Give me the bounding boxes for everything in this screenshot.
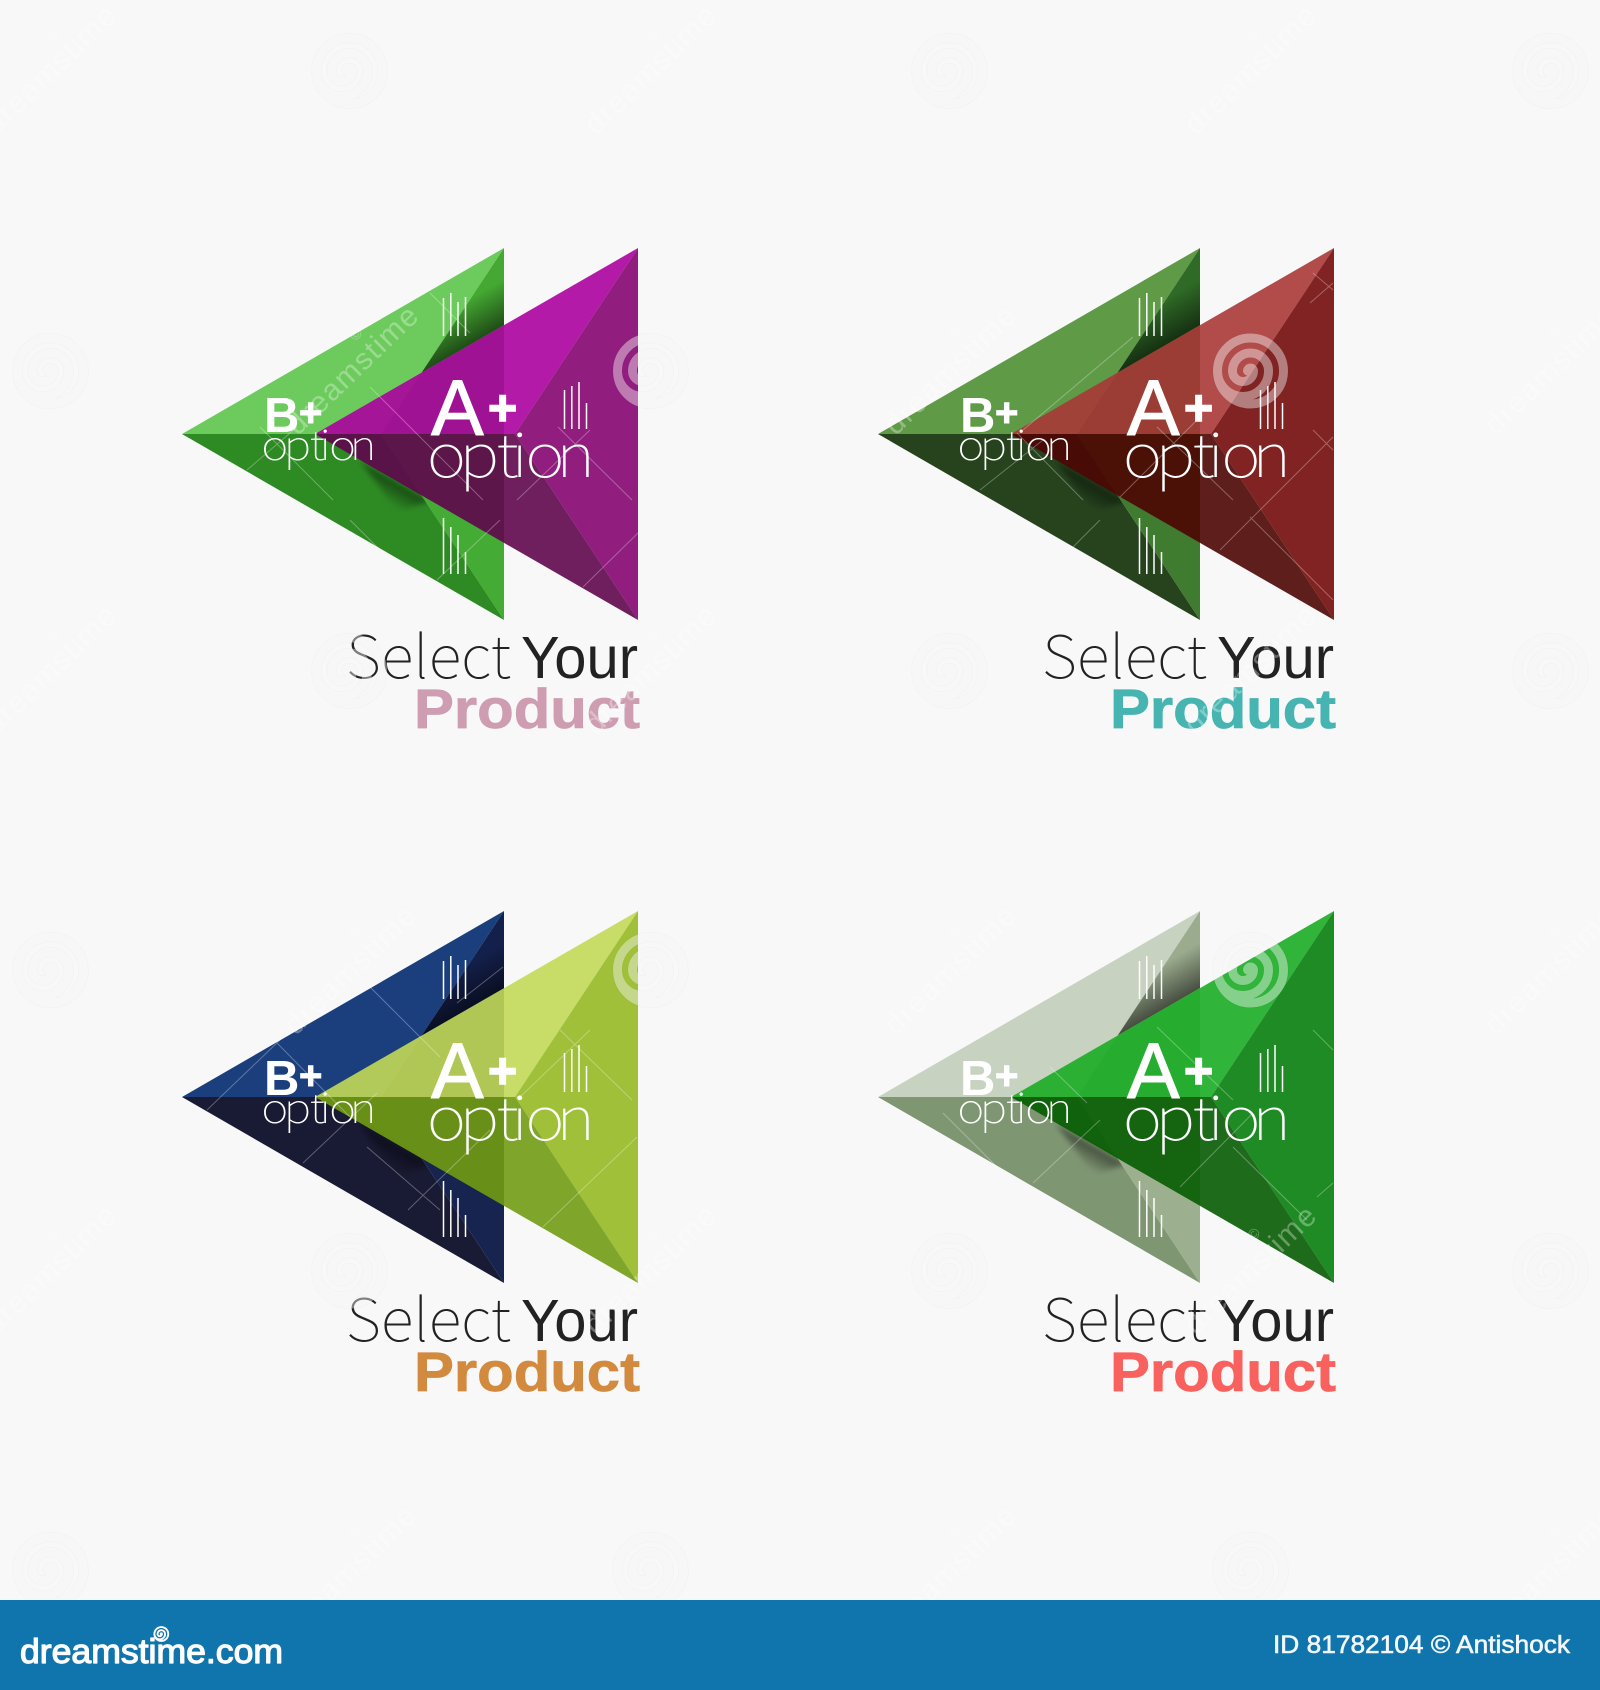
B+ grade: B [960, 389, 995, 443]
watermark: dreamstime diagonal text: © [44, 625, 64, 645]
icon: bars top [444, 956, 466, 999]
A+ grade [431, 363, 517, 452]
B+ grade [960, 1052, 1018, 1106]
watermark: dreamstime diagonal text: © [44, 25, 64, 45]
watermark: dreamstime diagonal text: © [644, 1225, 664, 1245]
back triangle: B option [878, 893, 1200, 1283]
B+ grade: + [995, 391, 1018, 435]
heading: product: Product [414, 677, 640, 740]
A+ grade: + [488, 1043, 517, 1099]
heading: select your [1042, 1273, 1334, 1358]
watermark: diagonal hairlines [207, 273, 1333, 1227]
B+ grade [264, 1052, 322, 1106]
watermark: dreamstime diagonal text: © [944, 325, 964, 345]
A+ grade: + [1184, 1043, 1213, 1099]
icon: bars top [444, 293, 466, 336]
watermark: dreamstime diagonal text: © [344, 925, 364, 945]
heading: product: Product [1110, 677, 1336, 740]
heading: select your: Select [1042, 1273, 1207, 1358]
large option label: option [427, 1071, 595, 1158]
icon: bars right [564, 1045, 586, 1092]
panel: lime and navy option arrows [182, 893, 640, 1403]
A+ grade [1127, 363, 1213, 452]
heading: select your [1042, 610, 1334, 695]
watermark: dreamstime diagonal text: dreamstime [278, 899, 423, 1041]
A+ grade: A [431, 1026, 484, 1115]
watermark: dreamstime diagonal text: © [344, 1525, 364, 1545]
icon: bars bottom [444, 518, 466, 574]
A+ grade: A [1127, 363, 1180, 452]
small option label: option [261, 413, 376, 472]
icon: bars right [564, 382, 586, 429]
heading: product: Product [414, 1340, 640, 1403]
watermark: dreamstime diagonal text: © [944, 925, 964, 945]
panel: purple and green option arrows [182, 230, 640, 740]
back triangle: B option [878, 230, 1200, 620]
A+ grade: A [431, 363, 484, 452]
watermark: dreamstime diagonal text: © [944, 1525, 964, 1545]
watermark: dreamstime diagonal text: © [644, 25, 664, 45]
small option label: option [957, 1076, 1072, 1135]
A+ grade [1127, 1026, 1213, 1115]
heading: select your: Select [346, 1273, 511, 1358]
B+ grade: + [299, 1054, 322, 1098]
heading: select your [346, 610, 638, 695]
A+ grade: + [488, 380, 517, 436]
watermark: dreamstime diagonal text: dreamstime [878, 899, 1023, 1041]
heading: select your: Your [521, 625, 638, 691]
icon: bars bottom [1140, 518, 1162, 574]
watermark: dreamstime diagonal text: © [1544, 925, 1564, 945]
front triangle: A option [1011, 248, 1334, 620]
front triangle: A option [315, 248, 638, 620]
footer logo text: dreamstime.com [20, 1633, 283, 1671]
A+ grade: + [1184, 380, 1213, 436]
B+ grade [264, 389, 322, 443]
icon: bars bottom [444, 1181, 466, 1237]
icon: bars bottom [1140, 1181, 1162, 1237]
icon: bars right [1260, 1045, 1282, 1092]
B+ grade: + [299, 391, 322, 435]
front triangle: A option [315, 911, 638, 1283]
panel: red and dark green option arrows [878, 230, 1336, 740]
large option label: option [1123, 1071, 1291, 1158]
icon: bars top [1140, 956, 1162, 999]
A+ grade [431, 1026, 517, 1115]
watermark: dreamstime diagonal text: dreamstime [1178, 599, 1323, 741]
panel: green and sage option arrows [878, 893, 1336, 1403]
large option label: option [427, 408, 595, 495]
footer logo spiral [154, 1627, 168, 1641]
watermark: dreamstime diagonal text: © [346, 325, 366, 345]
watermark: dreamstime diagonal text: dreamstime [878, 1499, 1023, 1641]
small option label: option [261, 1076, 376, 1135]
watermark: dreamstime diagonal text: dreamstime [578, 1199, 723, 1341]
A+ grade: A [1127, 1026, 1180, 1115]
watermark: dreamstime diagonal text: © [644, 625, 664, 645]
watermark: dreamstime diagonal text: dreamstime [578, 0, 723, 141]
heading: product: Product [1110, 1340, 1336, 1403]
B+ grade: B [960, 1052, 995, 1106]
watermark: dreamstime diagonal text: dreamstime [1178, 0, 1323, 141]
watermark: dreamstime diagonal text: dreamstime [280, 299, 425, 441]
heading: select your [346, 1273, 638, 1358]
front triangle: A option [1011, 911, 1334, 1283]
heading: select your: Your [1217, 625, 1334, 691]
heading: select your: Select [1042, 610, 1207, 695]
icon: bars right [1260, 382, 1282, 429]
watermark: dreamstime diagonal text: © [1244, 25, 1264, 45]
watermark: dreamstime diagonal text: dreamstime [1178, 1199, 1323, 1341]
watermark: dreamstime diagonal text: © [1544, 325, 1564, 345]
watermark: dreamstime diagonal text: © [1544, 1525, 1564, 1545]
watermark: dreamstime diagonal text: © [1244, 1225, 1264, 1245]
watermark: dreamstime diagonal text: dreamstime [578, 599, 723, 741]
watermark: dreamstime diagonal text: dreamstime [278, 1499, 423, 1641]
heading: select your: Your [521, 1288, 638, 1354]
back triangle: B option [182, 893, 504, 1283]
B+ grade: B [264, 1052, 299, 1106]
B+ grade [960, 389, 1018, 443]
back triangle: B option [182, 230, 504, 620]
heading: select your: Your [1217, 1288, 1334, 1354]
watermark: dreamstime diagonal text: dreamstime [878, 299, 1023, 441]
watermark: dreamstime diagonal text: © [44, 1225, 64, 1245]
B+ grade: B [264, 389, 299, 443]
heading: select your: Select [346, 610, 511, 695]
small option label: option [957, 413, 1072, 472]
watermark: dreamstime diagonal text: © [1244, 625, 1264, 645]
footer bar [0, 1600, 1600, 1690]
B+ grade: + [995, 1054, 1018, 1098]
footer credit: ID 81782104 © Antishock [1273, 1631, 1571, 1659]
icon: bars top [1140, 293, 1162, 336]
large option label: option [1123, 408, 1291, 495]
